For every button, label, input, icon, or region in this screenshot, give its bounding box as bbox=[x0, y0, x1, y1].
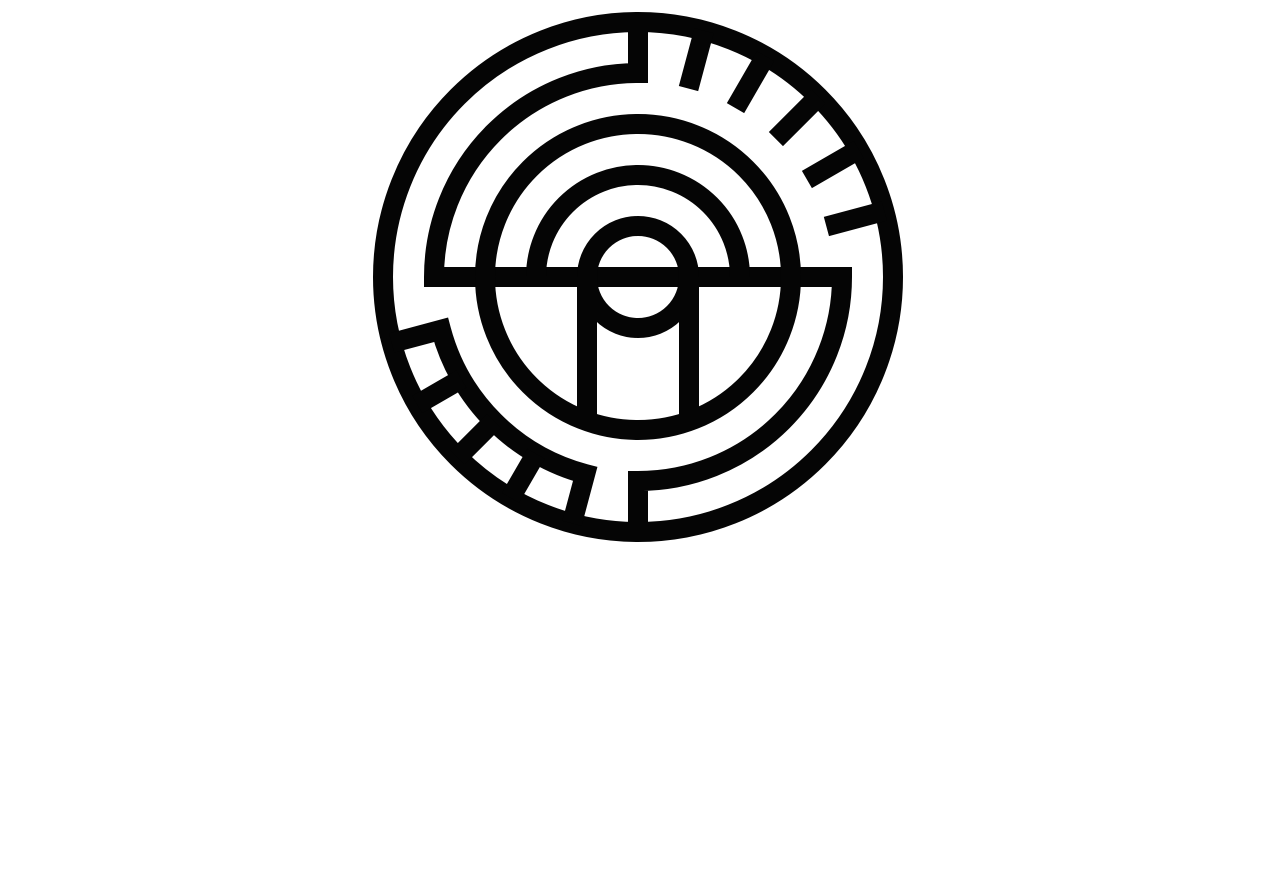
middle ring bbox=[485, 124, 791, 430]
S-shaped spiral with central horizontal bar bbox=[434, 22, 842, 532]
lower left radial ticks bbox=[417, 379, 536, 498]
central vertical pillars bbox=[587, 277, 689, 420]
lower left arc segment with end ticks bbox=[392, 330, 585, 523]
upper inner arch bbox=[536, 175, 740, 277]
emblem line work bbox=[383, 22, 893, 532]
outer ring bbox=[383, 22, 893, 532]
upper right radial ticks bbox=[688, 31, 884, 227]
central small ring bbox=[587, 226, 689, 328]
